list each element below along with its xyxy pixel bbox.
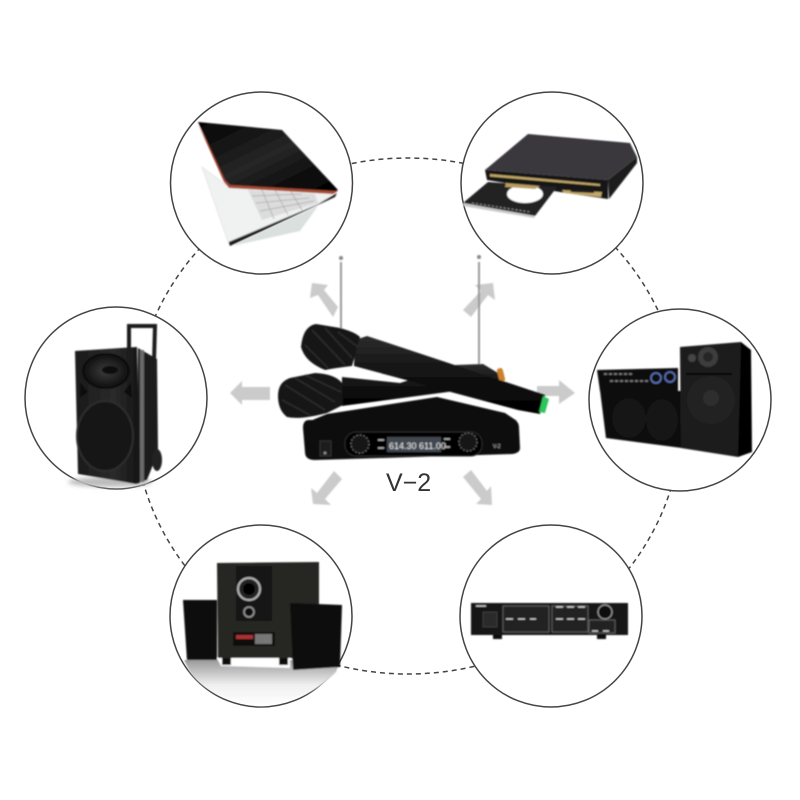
- right antenna: [477, 255, 481, 368]
- arrow: up-left: [310, 283, 338, 317]
- circle: amplifier with speakers: [589, 309, 771, 491]
- icon: DVD player: [463, 134, 637, 218]
- circle: computer speakers: [170, 525, 352, 707]
- icon: AV receiver: [471, 603, 628, 639]
- icon: computer speaker set: [183, 562, 342, 706]
- icon: trolley speaker: [68, 326, 162, 487]
- arrow: right: [537, 380, 575, 404]
- microphone: rear: [278, 364, 506, 418]
- icon: amplifier with speakers: [597, 342, 752, 457]
- receiver unit: [303, 397, 520, 460]
- arrow: down-left: [311, 471, 342, 505]
- circle: DVD player: [461, 92, 643, 274]
- circle: laptop: [170, 92, 352, 274]
- arrow: up-right: [463, 283, 495, 317]
- circle: AV receiver: [460, 525, 642, 707]
- center product: wireless microphone system: [278, 255, 549, 460]
- left antenna: [339, 256, 343, 330]
- dashed connection ring: [134, 158, 682, 674]
- display panel: 614.30 611.00: [389, 441, 446, 451]
- arrow: down-right: [463, 470, 492, 505]
- circle: trolley speaker: [25, 307, 207, 489]
- arrow: left: [230, 381, 270, 405]
- receiver unit: V-2: [493, 444, 501, 450]
- display panel: [345, 432, 482, 456]
- icon: laptop: [198, 122, 338, 246]
- microphone: front: [301, 324, 549, 414]
- label: model name: V−2: [386, 469, 431, 497]
